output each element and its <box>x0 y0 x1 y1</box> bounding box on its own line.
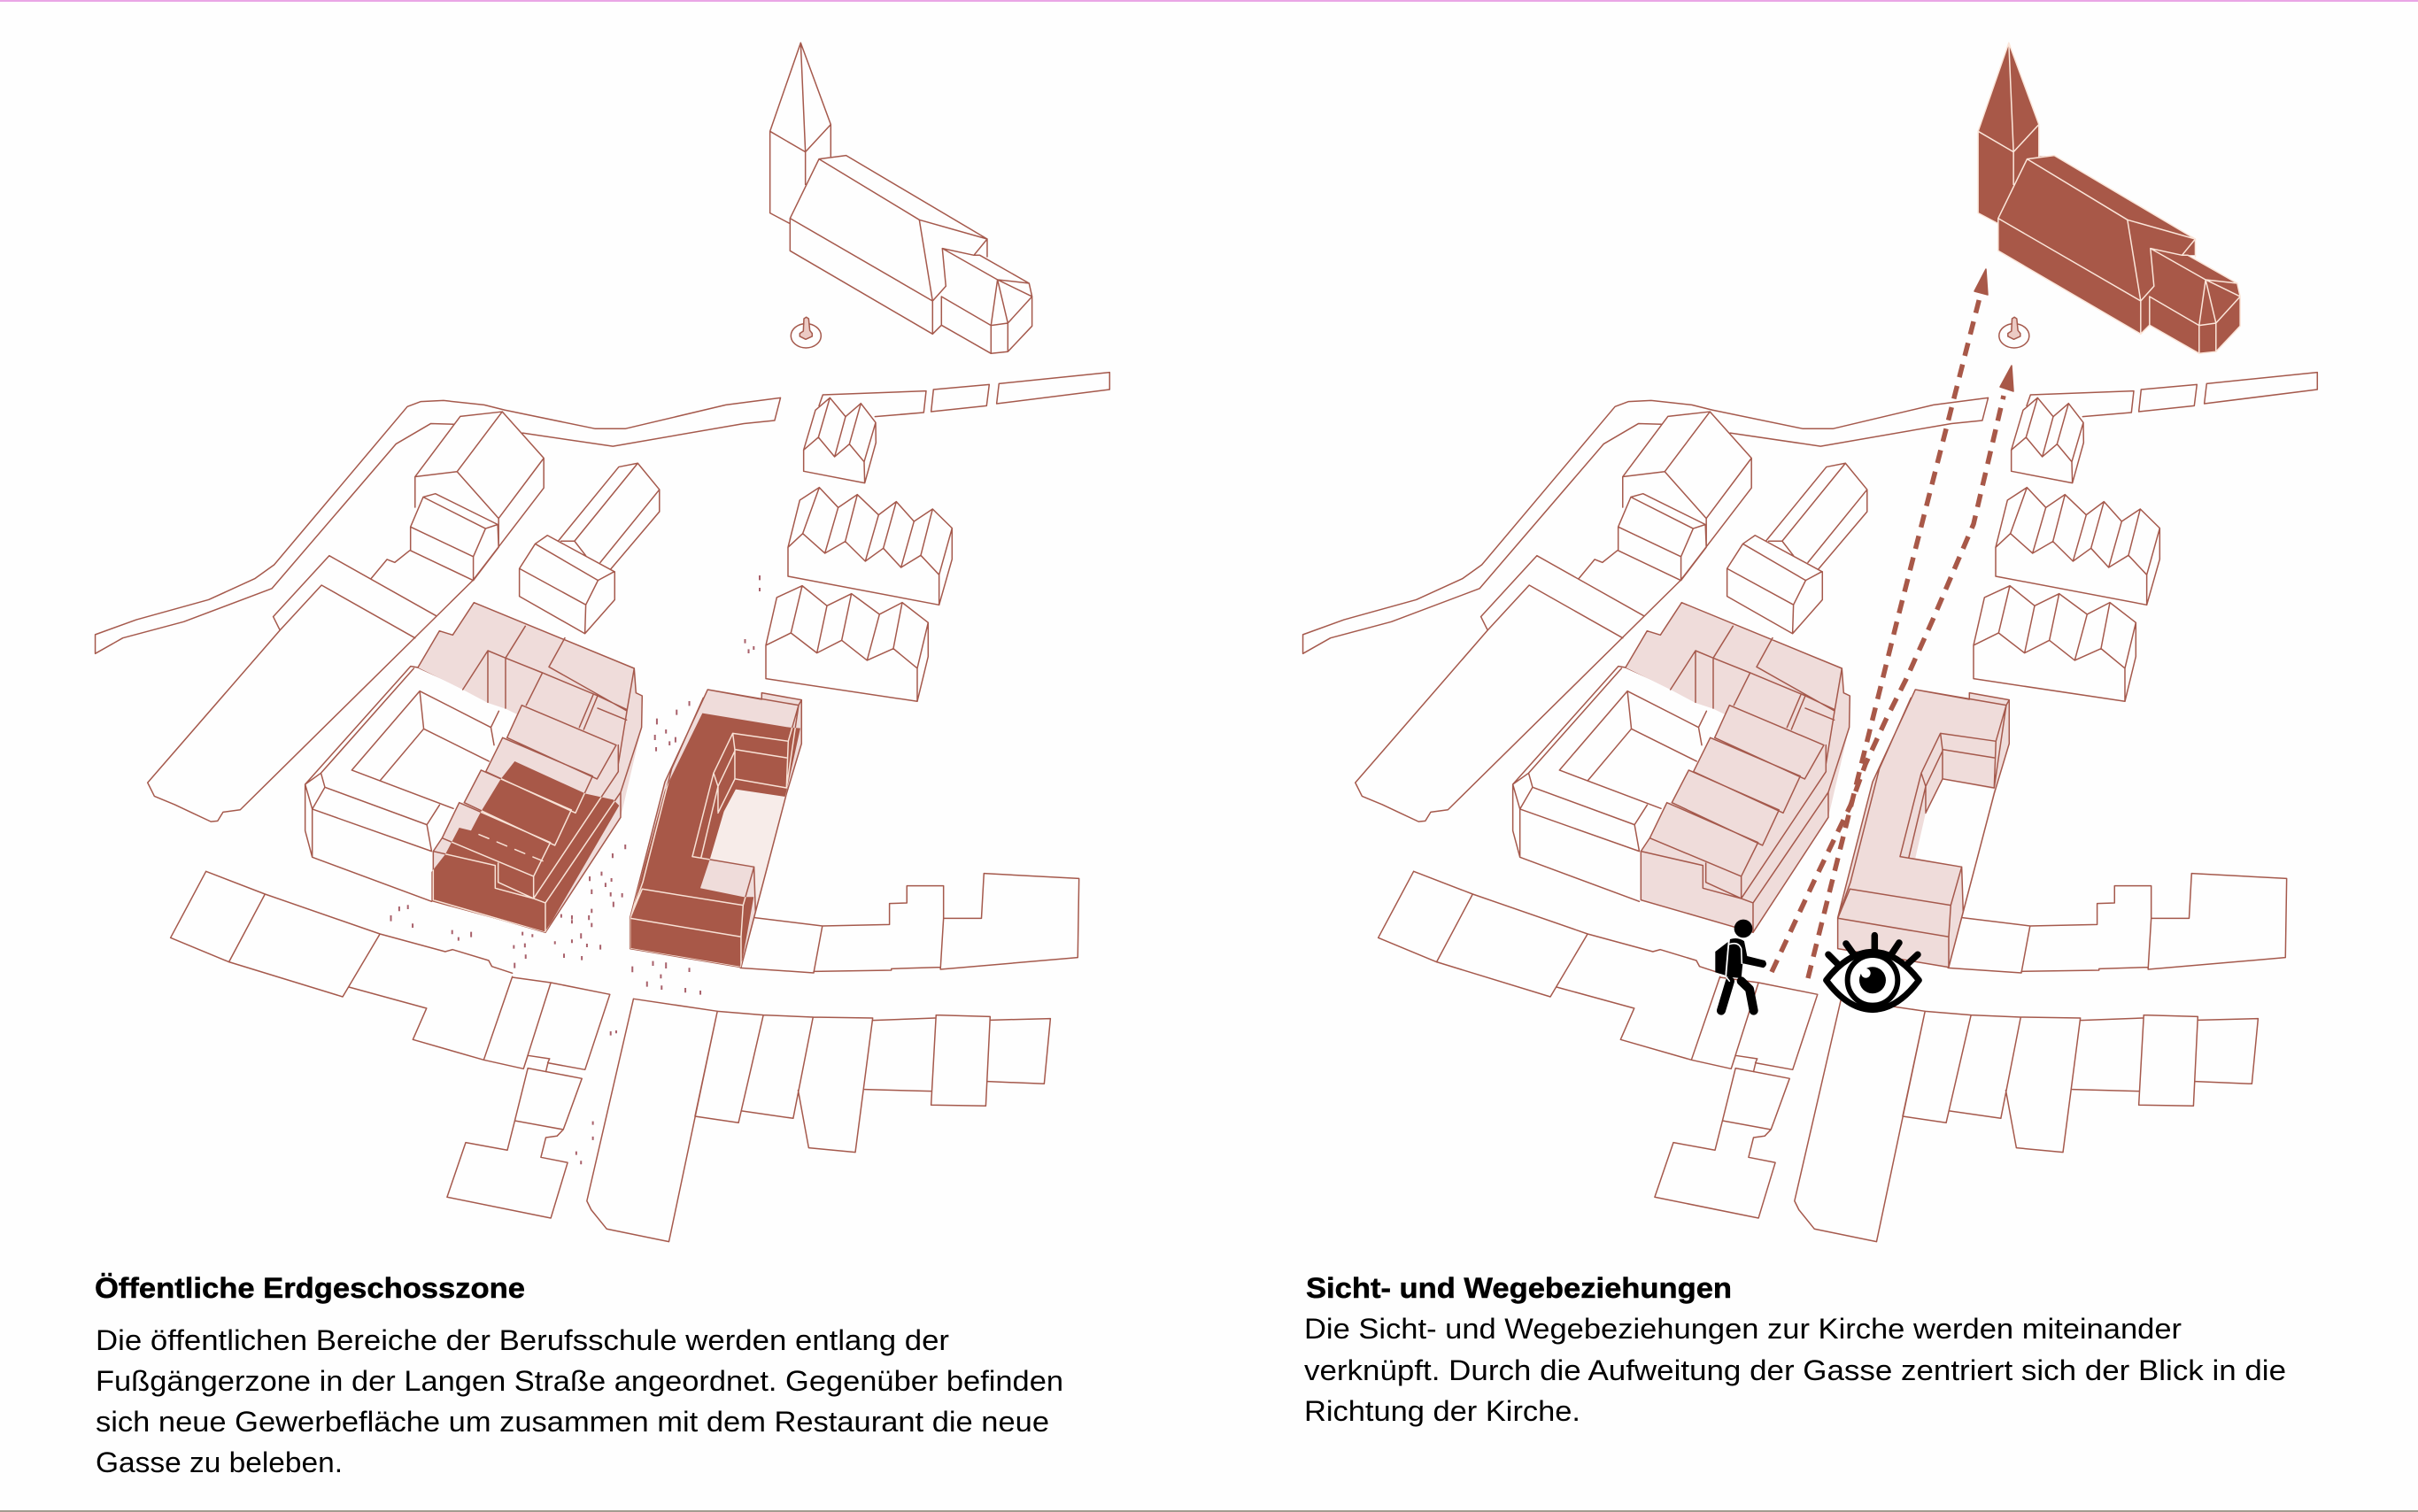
southern building plots <box>1379 871 2287 1242</box>
text block: left caption <box>95 1272 1063 1478</box>
west plot <box>148 556 473 822</box>
top page border <box>0 0 2418 2</box>
body text: right: Richtung der Kirche. <box>1304 1395 1580 1427</box>
existing courtyard building <box>305 667 519 901</box>
sight line arrow to the church tower from the eye <box>1808 269 1988 978</box>
street strip <box>96 397 781 653</box>
pedestrians in the lane <box>391 575 760 1164</box>
west plot <box>1356 556 1680 822</box>
vocational school, west block with public ground floor highlighted <box>418 603 642 932</box>
panel: right map, visual and path relations <box>1303 42 2317 1242</box>
text block: right caption <box>1304 1272 2286 1427</box>
new commercial block in pale tone <box>1838 690 2009 968</box>
panel: left map, public ground floor zone <box>96 42 1109 1242</box>
body text: left <box>96 1324 1063 1478</box>
southern building plots <box>171 871 1079 1242</box>
northwest houses <box>1579 412 1867 634</box>
row houses and northern street blocks <box>766 373 1109 701</box>
heading: left: Öffentliche Erdgeschosszone <box>95 1272 525 1304</box>
vocational school, west block in pale tone <box>1626 603 1850 932</box>
body text: left: sich neue Gewerbefläche um zusammen mit dem Restaurant die neue <box>96 1406 1049 1438</box>
icon: eye <box>1827 936 1919 1010</box>
church highlighted <box>1978 42 2240 353</box>
church square monument <box>1999 317 2029 348</box>
icon: pedestrian <box>1715 920 1766 1011</box>
church square monument <box>791 317 821 348</box>
new commercial block with public ground floor highlighted <box>630 690 801 968</box>
body text: left: Fußgängerzone in der Langen Straße angeordnet. Gegenüber befinden <box>96 1365 1063 1397</box>
church outline <box>770 42 1032 353</box>
sight line arrow to the church from the pedestrian <box>1772 366 2013 972</box>
existing courtyard building <box>1513 667 1727 901</box>
row houses and northern street blocks <box>1974 373 2317 701</box>
body text: right: verknüpft. Durch die Aufweitung der Gasse zentriert sich der Blick in die <box>1304 1354 2286 1386</box>
street strip <box>1303 397 1989 653</box>
bottom page border <box>0 1510 2418 1512</box>
body text: right: Die Sicht- und Wegebeziehungen zur Kirche werden miteinander <box>1304 1313 2182 1345</box>
body text: left: Gasse zu beleben. <box>96 1446 343 1478</box>
northwest houses <box>371 412 660 634</box>
heading: right: Sicht- und Wegebeziehungen <box>1306 1272 1732 1304</box>
body text: left: Die öffentlichen Bereiche der Berufsschule werden entlang der <box>96 1324 949 1356</box>
body text: right <box>1304 1313 2286 1427</box>
